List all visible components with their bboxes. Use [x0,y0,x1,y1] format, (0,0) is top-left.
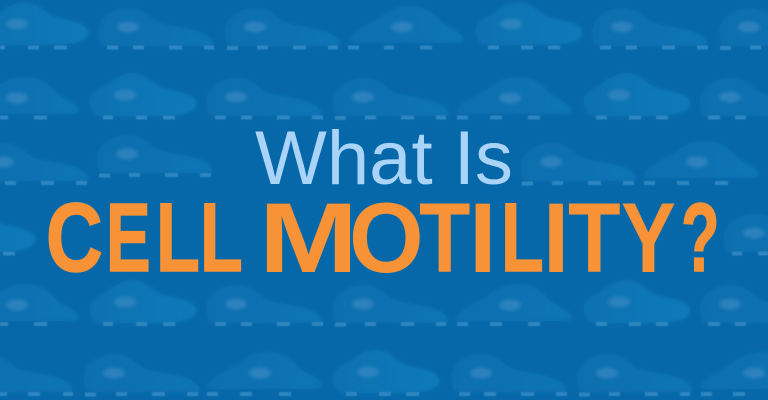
cell pattern row 4 [0,209,768,254]
title line: CELL MOTILITY?: E [106,183,151,292]
cell pattern row 3 [0,135,759,184]
title line: CELL MOTILITY?: I [543,182,569,293]
title line: CELL MOTILITY?: L [156,183,199,292]
title line: CELL MOTILITY?: T [568,182,621,293]
title line: CELL MOTILITY?: ? [681,183,720,292]
cell pattern row 6 [0,350,768,394]
title line: CELL MOTILITY?: I [469,182,497,293]
cell pattern row 1 [0,2,768,48]
cell pattern row 5 [0,280,768,324]
title line: CELL MOTILITY?: O [349,182,424,293]
title line: CELL MOTILITY?: Y [621,182,676,293]
title line: What Is: What Is [255,116,513,201]
title line: CELL MOTILITY?: M [259,182,358,293]
title line: CELL MOTILITY?: L [501,183,543,292]
title line: CELL MOTILITY?: T [419,182,471,293]
title line: CELL MOTILITY?: L [200,183,242,292]
title line: CELL MOTILITY?: C [46,183,103,292]
cell pattern row 2 [0,73,768,118]
